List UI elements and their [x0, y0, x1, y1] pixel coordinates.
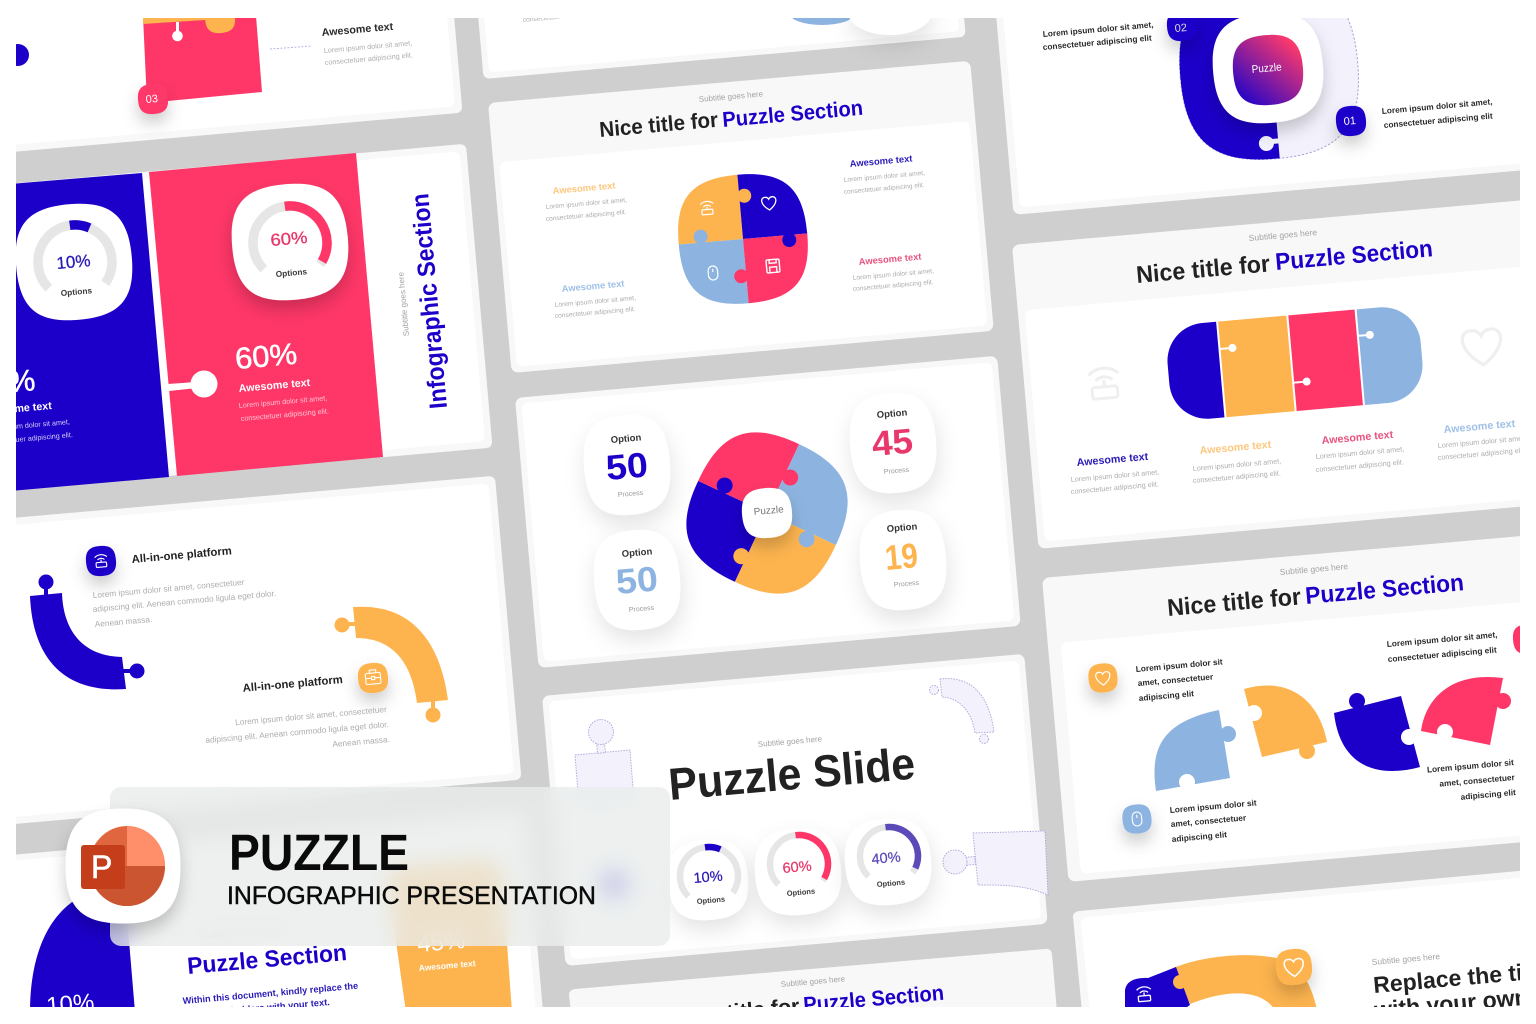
panel: capsule puzzle slide	[1012, 198, 1536, 549]
panel: nice title with four-piece puzzle	[488, 61, 994, 373]
card: 50 blue: Process	[618, 490, 644, 499]
text: pink: consectetuer adipiscing elit.	[853, 279, 934, 293]
title	[726, 981, 945, 1024]
title: title for	[726, 994, 801, 1024]
ring puzzle	[1161, 0, 1366, 178]
pink column connector	[168, 370, 218, 398]
pink badge 03	[137, 83, 169, 115]
blue puzzle circle	[16, 44, 29, 66]
title	[1372, 957, 1536, 1023]
badge 02: 02	[1174, 22, 1187, 35]
text block: pink column	[236, 343, 328, 421]
card: 40% gauge: Options	[876, 878, 905, 889]
text: yellow: Awesome text	[552, 180, 616, 196]
text block: awesome text: Lorem ipsum dolor sit amet,	[323, 38, 413, 55]
icon: heart badge	[1087, 662, 1119, 694]
text: light blue: Lorem ipsum dolor sit amet,	[555, 295, 636, 309]
light blue puzzle piece	[1154, 710, 1236, 791]
icon: wifi	[700, 201, 714, 215]
subtitle: Subtitle goes here	[1279, 561, 1349, 577]
text block: Within this document, kindly replace the	[182, 981, 359, 1006]
blue curved puzzle piece	[30, 574, 144, 689]
title: Puzzle Section	[721, 96, 864, 132]
card: 60% gauge: Options	[275, 266, 308, 279]
pink badge	[1512, 623, 1536, 655]
title	[1135, 235, 1434, 289]
panel: slide top-left with pink puzzle piece	[16, 18, 462, 152]
subtitle: Subtitle goes here	[1248, 227, 1318, 243]
text block right: adipiscing elit. Aenean commodo ligula eget dolor.	[205, 719, 389, 745]
card: 40% gauge	[841, 815, 935, 909]
piece connector	[172, 22, 183, 41]
blurred subtitle: Subtitle goes here	[199, 921, 289, 941]
icon: yellow case badge	[357, 662, 389, 694]
panel: all-in-one platform slide	[0, 476, 522, 827]
text bottom-left: Lorem ipsum dolor sit	[1169, 797, 1257, 815]
subtitle: Subtitle goes here	[757, 734, 823, 749]
text: yellow: Awesome text	[1199, 439, 1272, 457]
text block right	[206, 708, 390, 747]
subtitle: Subtitle goes here	[698, 89, 764, 104]
card: 60% gauge	[751, 825, 845, 919]
blue column	[10, 173, 169, 491]
card: 45 pink: 45	[870, 422, 915, 464]
text left: consectetuer adipiscing elit	[1042, 32, 1152, 52]
text: light blue: Lorem ipsum dolor sit amet,	[1437, 433, 1527, 450]
card: 10% gauge	[16, 204, 132, 320]
heart badge	[1274, 947, 1314, 987]
card: 50 light blue: Option	[621, 546, 653, 560]
text: light blue: consectetuer adipiscing elit.	[555, 306, 636, 320]
subtitle: Subtitle goes here	[780, 974, 846, 989]
text top-right: Lorem ipsum dolor sit amet,	[1386, 629, 1498, 649]
text: yellow	[1192, 439, 1282, 485]
card: 50 blue: 50	[604, 445, 650, 488]
white blob edge	[848, 18, 936, 48]
heading right: All-in-one platform	[242, 674, 343, 695]
chart: four-piece puzzle	[667, 163, 819, 315]
text bottom-right	[1426, 757, 1516, 802]
yellow puzzle strip	[143, 18, 205, 24]
title: Puzzle Slide	[666, 738, 917, 810]
card: 10% gauge: 10%	[693, 869, 723, 887]
panel: frosted title banner	[110, 787, 670, 946]
icon: faint wifi	[1088, 367, 1120, 399]
panel: top-right ring puzzle slide	[987, 0, 1536, 215]
card: 40% gauge: 40%	[871, 850, 901, 868]
card: 10% gauge	[665, 837, 751, 923]
text: blue	[1070, 451, 1160, 496]
panel: separated puzzle pieces slide	[1042, 531, 1536, 882]
title	[598, 96, 864, 142]
yellow puzzle piece	[1244, 685, 1327, 759]
text: pink	[853, 251, 934, 293]
text: yellow: Lorem ipsum dolor sit amet,	[546, 197, 627, 211]
text block: awesome text	[322, 23, 412, 65]
clipped caption: consectetuer	[523, 14, 562, 24]
text block: adipiscing elit. Aenean commodo ligula eget dolor.	[92, 588, 277, 614]
blue puzzle piece	[1334, 693, 1420, 771]
chart: puzzle wheel	[661, 407, 873, 619]
icon: powerpoint logo	[66, 808, 180, 924]
text: pink: Awesome text	[858, 251, 922, 267]
text block: Lorem ipsum dolor sit amet, consectetuer	[92, 577, 245, 600]
card: 19 yellow: Process	[894, 580, 920, 589]
card: 45 pink: Process	[884, 467, 910, 476]
badge 02	[1166, 10, 1198, 42]
card: 19 yellow: Option	[886, 521, 918, 535]
text: pink: consectetuer adipiscing elit.	[1315, 457, 1404, 474]
text: pink: Awesome text	[1321, 429, 1394, 447]
text: blue: consectetuer adipiscing elit.	[1070, 479, 1159, 496]
yellow curved puzzle piece	[334, 607, 448, 722]
title: Nice title for	[1166, 583, 1302, 622]
title: Nice title for	[598, 108, 720, 142]
title: Puzzle Section	[802, 981, 945, 1017]
blue arc with wifi icon	[1125, 967, 1190, 1012]
text right: Lorem ipsum dolor sit amet,	[1381, 96, 1493, 116]
text block: pink column: 60%	[234, 338, 298, 376]
chart: capsule puzzle	[1161, 302, 1430, 424]
title	[1166, 569, 1465, 622]
title: Puzzle Section	[1304, 569, 1465, 610]
text: yellow	[546, 180, 627, 223]
pink puzzle piece	[143, 16, 262, 103]
blurred dot under panel	[599, 869, 629, 899]
text: blue: Awesome text	[1076, 451, 1149, 469]
text: light blue	[555, 278, 636, 320]
panel: infographic section slide	[0, 144, 493, 495]
subtitle: infographic presentation: INFOGRAPHIC PRESENTATION	[227, 882, 596, 910]
card: 50 blue	[580, 411, 674, 519]
title: Puzzle Section	[1274, 235, 1434, 276]
heading: All-in-one platform	[131, 545, 232, 566]
text right	[1381, 96, 1493, 130]
title: with your own	[1372, 984, 1529, 1023]
card: 45 pink: Option	[876, 407, 908, 421]
text block: pink column: consectetuer adipiscing elit.	[240, 406, 329, 423]
panel: option cards with puzzle wheel	[515, 356, 1021, 668]
text: blue	[844, 153, 925, 196]
dotted puzzle right	[943, 831, 1048, 895]
card: 50 light blue: 50	[614, 559, 660, 602]
center puzzle label: Puzzle	[753, 504, 785, 518]
card: 50 blue: Option	[610, 432, 642, 446]
text: light blue: Awesome text	[561, 278, 625, 294]
text bottom-right: amet, consectetuer	[1439, 772, 1516, 789]
text: light blue: Awesome text	[1443, 418, 1516, 436]
card: 60% gauge: 60%	[270, 228, 308, 250]
panel: bottom-left puzzle section slide	[16, 829, 542, 1007]
text block: blue column	[16, 370, 72, 442]
text top-right: consectetuer adipiscing elit	[1387, 644, 1497, 664]
card: 10% gauge: Options	[60, 285, 93, 298]
text block: awesome text: consectetuer adipiscing elit.	[324, 50, 413, 67]
yellow badge 02	[205, 18, 236, 34]
text block right: Lorem ipsum dolor sit amet, consectetuer	[235, 704, 387, 727]
text bottom-right: adipiscing elit	[1460, 787, 1516, 802]
icon: mouse	[708, 266, 718, 280]
title: Nice title for	[1135, 250, 1271, 289]
text 45%	[418, 934, 476, 971]
card: 50 light blue	[590, 526, 684, 634]
panel: top-middle slide	[478, 18, 966, 78]
text: blue: Lorem ipsum dolor sit amet,	[844, 170, 925, 184]
text 45%: Awesome text	[418, 958, 476, 973]
text: yellow: consectetuer adipiscing elit.	[1192, 468, 1281, 485]
text: pink	[1315, 429, 1405, 474]
light blue puzzle edge	[792, 18, 850, 25]
pink puzzle piece	[1421, 677, 1511, 745]
text block: pink column: Awesome text	[238, 377, 311, 395]
icon: blue wifi badge	[85, 545, 117, 577]
dashed leader	[270, 46, 312, 49]
pink column	[149, 153, 383, 476]
card: 19 yellow	[856, 506, 950, 614]
gradient center puzzle: Puzzle	[1251, 61, 1282, 76]
subtitle: Subtitle goes here	[1371, 951, 1441, 967]
card: 60% gauge: Options	[786, 887, 815, 898]
title vertical: Infographic Section	[406, 192, 453, 410]
text block: awesome text: Awesome text	[321, 21, 394, 39]
text: pink: Lorem ipsum dolor sit amet,	[1315, 444, 1405, 461]
text block: placeholders with your text.	[207, 997, 330, 1018]
text: blue: Awesome text	[849, 153, 913, 169]
text 45%: 45%	[416, 927, 466, 958]
text bottom-left: adipiscing elit	[1171, 829, 1228, 844]
text block: Aenean massa.	[94, 614, 153, 629]
text right: consectetuer adipiscing elit	[1383, 110, 1493, 130]
panel: puzzle slide cover	[542, 654, 1048, 966]
text block right: Aenean massa.	[332, 734, 390, 749]
yellow arc	[1173, 955, 1317, 1010]
text: yellow: Lorem ipsum dolor sit amet,	[1192, 456, 1282, 473]
card: 50 light blue: Process	[629, 605, 655, 614]
icon: floppy	[766, 259, 780, 273]
badge 01: 01	[1343, 115, 1356, 128]
card: 60% gauge: 60%	[782, 859, 812, 877]
text left	[1042, 19, 1154, 52]
text: light blue: consectetuer adipiscing elit.	[1437, 445, 1526, 462]
white inner blob	[1208, 8, 1328, 128]
card: 19 yellow: 19	[883, 536, 920, 578]
blue column	[30, 893, 135, 1012]
center puzzle label	[740, 486, 794, 540]
icon: heart	[761, 196, 777, 211]
icon: powerpoint logo: P	[91, 849, 112, 885]
text block	[93, 580, 276, 627]
gradient center puzzle	[1230, 32, 1306, 108]
badge 01	[1335, 105, 1367, 137]
text top-left: adipiscing elit	[1138, 688, 1195, 703]
dotted puzzle left	[575, 720, 634, 805]
text: pink: Lorem ipsum dolor sit amet,	[853, 268, 934, 282]
card: 45 pink	[846, 389, 940, 497]
yellow column	[388, 860, 512, 1012]
card: 60% gauge	[227, 179, 353, 305]
dotted puzzle top right	[930, 679, 994, 744]
text top-left: amet, consectetuer	[1137, 671, 1214, 688]
panel: bottom-middle title slide	[569, 949, 1057, 1024]
text top-left	[1135, 656, 1223, 703]
title: PUZZLE: PUZZLE	[229, 824, 409, 881]
10% label: 10%	[45, 989, 95, 1020]
card: 10% gauge: 10%	[56, 251, 91, 273]
text bottom-left	[1169, 797, 1257, 844]
icon: mouse badge	[1121, 803, 1153, 835]
text: yellow: consectetuer adipiscing elit.	[546, 209, 627, 223]
text left: Lorem ipsum dolor sit amet,	[1042, 19, 1154, 39]
subtitle vertical: Subtitle goes here	[396, 271, 411, 337]
heading: Puzzle Section	[186, 939, 348, 979]
text: light blue	[1437, 418, 1527, 462]
panel: replace the title slide	[1073, 870, 1536, 1023]
icon: faint heart	[1462, 328, 1503, 366]
pink badge 03: 03	[145, 93, 158, 106]
text bottom-right: Lorem ipsum dolor sit	[1426, 757, 1514, 775]
text: blue: Lorem ipsum dolor sit amet,	[1070, 467, 1160, 484]
text block: pink column: Lorem ipsum dolor sit amet,	[238, 393, 328, 410]
text top-left: Lorem ipsum dolor sit	[1135, 656, 1223, 674]
card: 10% gauge: Options	[696, 895, 725, 906]
text top-right	[1386, 629, 1498, 664]
text bottom-left: amet, consectetuer	[1170, 812, 1247, 829]
text: blue: consectetuer adipiscing elit.	[844, 182, 925, 196]
